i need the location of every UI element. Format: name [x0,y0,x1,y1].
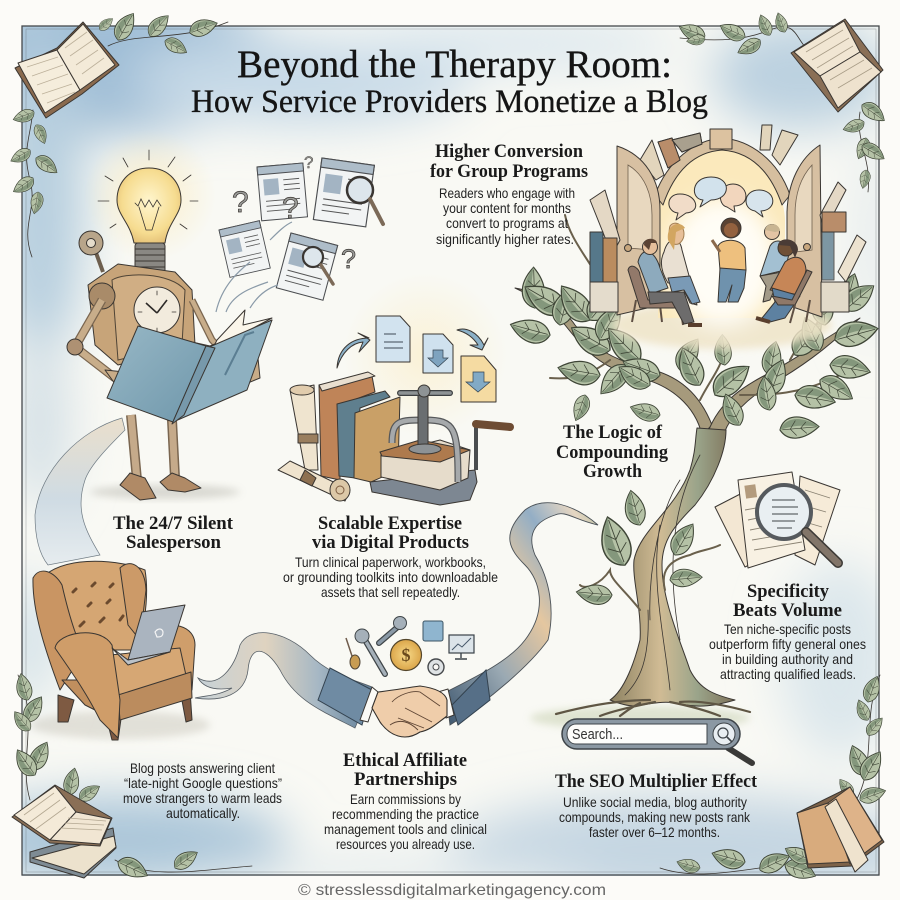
illustration: group therapy doorway [590,125,866,349]
page: lower-left [219,221,270,277]
sleeve right [452,670,490,725]
standing books [319,372,400,482]
copyright footer: © stresslessdigitalmarketingagency.com [298,882,606,899]
illustration: armchair with laptop [30,561,210,740]
text block: scalable expertise: Turn clinical paperwork, workbooks, [295,554,486,570]
illustration: search bar: Search... [572,726,623,743]
robot arms [67,300,260,388]
title: Beyond the Therapy Room: [237,43,672,86]
illustration: ribbon from handshake to tree [446,503,598,725]
text block: SEO multiplier effect: The SEO Multiplier Effect [555,771,758,792]
book press [370,385,510,505]
text block: higher conversion: Higher Conversion [435,141,583,162]
books and scrolls beside doors [590,182,866,312]
cuffs [360,687,454,722]
speech bubbles [669,177,773,220]
illustration: lightbulb robot reading [67,129,272,500]
chair right arm, seat and skirt [150,625,195,690]
text block: higher conversion [430,141,588,247]
text block: ethical affiliate partnerships: Earn commissions by [350,791,461,807]
robot legs and feet [90,415,240,500]
title: How Service Providers Monetize a Blog [191,84,708,120]
doorway arch and glow [640,125,798,327]
title [191,43,708,120]
illustration: specificity papers and magnifier [715,472,840,568]
robot torso and clock [88,264,195,365]
text block: ethical affiliate partnerships: Ethical Affiliate [343,750,467,771]
text block: specificity beats volume: outperform fifty general ones [709,636,866,652]
doorway floor [612,301,832,349]
text block: specificity beats volume: attracting qualified leads. [720,666,856,682]
text block: silent salesperson description: “late-night Google questions” [124,775,282,791]
text block: higher conversion: your content for months [443,200,571,216]
question marks: ? [232,186,249,219]
text block: ethical affiliate partnerships: recommending the practice [332,806,479,822]
corner decoration: top-left book and vines [8,9,228,257]
page: top-center [257,163,308,221]
text block: silent salesperson description [123,760,282,821]
scrolls [278,385,350,501]
robot antenna gear [79,231,103,272]
question marks [232,153,356,274]
illustration: ribbon from chair to handshake [195,633,372,728]
swoosh trails [216,222,292,312]
text block: logic of compounding growth: Compounding [556,442,668,463]
tree trunk and branches [515,215,860,706]
text block: scalable expertise [283,513,498,600]
chair back and wings [45,561,147,650]
text block: higher conversion: significantly higher rates. [436,231,574,247]
text block: silent salesperson description: Blog posts answering client [130,760,275,776]
corner decoration: top-right book and vines [677,11,889,192]
tree leaves [507,267,880,606]
tufted buttons [73,583,123,626]
text block: scalable expertise: assets that sell repeatedly. [321,584,460,600]
tree roots [556,700,750,716]
seated group of people [628,218,812,325]
open blue book [107,310,272,424]
laptop [112,605,185,665]
text block: higher conversion: for Group Programs [430,161,588,182]
text block: specificity beats volume: Specificity [747,581,829,602]
text block: ethical affiliate partnerships: management tools and clinical [324,821,487,837]
lightbulb [117,168,181,273]
page: search magnifier [313,158,383,227]
clasped hands [372,686,447,737]
chair legs [58,690,192,740]
corner decoration: bottom-right book and vines [660,674,888,883]
text block: higher conversion: convert to programs at [446,215,568,231]
light rays [98,150,198,229]
tools: $ [402,645,410,665]
illustration: left ribbon [35,418,125,565]
text block: higher conversion: Readers who engage with [439,185,575,201]
text block: scalable expertise: or grounding toolkits into downloadable [283,569,498,585]
text block: SEO multiplier effect: faster over 6–12 months. [589,824,720,840]
text block: logic of compounding growth [556,422,668,482]
illustration: search bar [562,719,752,763]
text block: specificity beats volume: Beats Volume [733,600,842,621]
illustration: scalable expertise, book press [278,273,510,505]
illustration: handshake and tools [318,616,490,737]
text block: specificity beats volume: Ten niche-specific posts [724,621,851,637]
text block: ethical affiliate partnerships: Partnerships [354,769,457,790]
text block: logic of compounding growth: Growth [583,461,642,482]
illustration: tree [507,215,880,730]
text block: scalable expertise: Scalable Expertise [318,513,462,534]
text block: silent salesperson heading: Salesperson [126,532,221,553]
text block: silent salesperson heading [113,513,234,553]
question marks: ? [282,192,299,225]
question marks: ? [304,153,313,172]
text block: silent salesperson description: automatically. [166,805,240,821]
text block: scalable expertise: via Digital Products [312,532,469,553]
text block: silent salesperson description: move strangers to warm leads [123,790,282,806]
text block: specificity beats volume: in building authority and [722,651,853,667]
download documents [337,316,496,402]
text block: SEO multiplier effect [555,771,758,840]
text block: SEO multiplier effect: Unlike social media, blog authority [563,794,747,810]
text block: ethical affiliate partnerships: resources you already use. [336,836,475,852]
doors [617,145,822,317]
tools [346,616,474,675]
text block: silent salesperson heading: The 24/7 Silent [113,513,234,534]
text block: ethical affiliate partnerships [324,750,487,852]
text block: SEO multiplier effect: compounds, making new posts rank [559,809,751,825]
sleeve left [318,668,372,725]
floating web pages and question marks [216,153,383,312]
page: lower-center [276,233,338,300]
corner decoration: bottom-left books and vines [9,672,252,883]
question marks: ? [341,244,356,274]
text block: logic of compounding growth: The Logic of [563,422,663,443]
chair left arm [55,633,120,738]
text block: specificity beats volume [709,581,866,682]
